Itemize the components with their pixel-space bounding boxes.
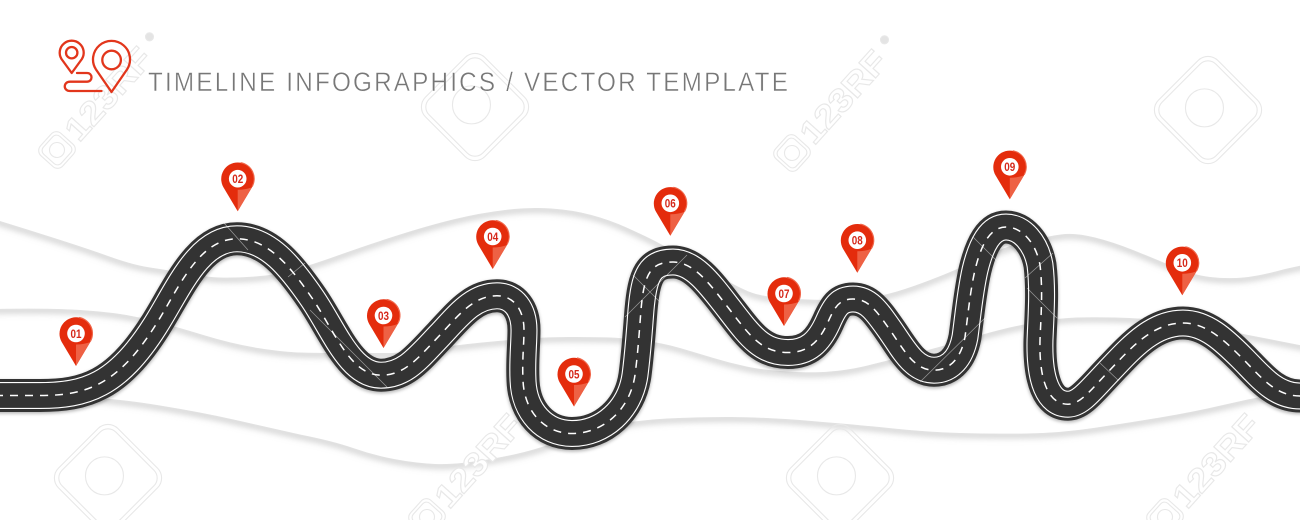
pin 06: 06 (665, 197, 676, 211)
watermarks: 123RF (792, 43, 894, 151)
pin 07 (768, 277, 800, 326)
pin 02: 02 (232, 172, 243, 186)
pin 05 (558, 358, 590, 406)
pin 04: 04 (487, 230, 498, 244)
title: TIMELINE INFOGRAPHICS / VECTOR TEMPLATE (148, 68, 788, 97)
watermarks: 123RF (1165, 407, 1267, 515)
pin 01: 01 (70, 327, 82, 341)
icon: route with two map pins (60, 41, 130, 92)
pin 09 (993, 151, 1026, 199)
pin 08: 08 (852, 233, 863, 247)
pin 03 (367, 299, 400, 348)
pin 10 (1166, 247, 1199, 295)
watermarks: 123RF (427, 407, 529, 515)
pin 01 (60, 317, 92, 366)
pin 06 (654, 187, 687, 236)
pin 08 (841, 224, 874, 273)
pin 03: 03 (378, 309, 389, 323)
pin 09: 09 (1004, 160, 1016, 174)
pin 02 (221, 162, 254, 211)
pin 05: 05 (568, 367, 580, 381)
pin 04 (476, 220, 509, 269)
winding road (0, 223, 1300, 435)
pin 07: 07 (778, 287, 790, 301)
pin 10: 10 (1177, 256, 1188, 270)
watermarks: 123RF (57, 40, 159, 148)
